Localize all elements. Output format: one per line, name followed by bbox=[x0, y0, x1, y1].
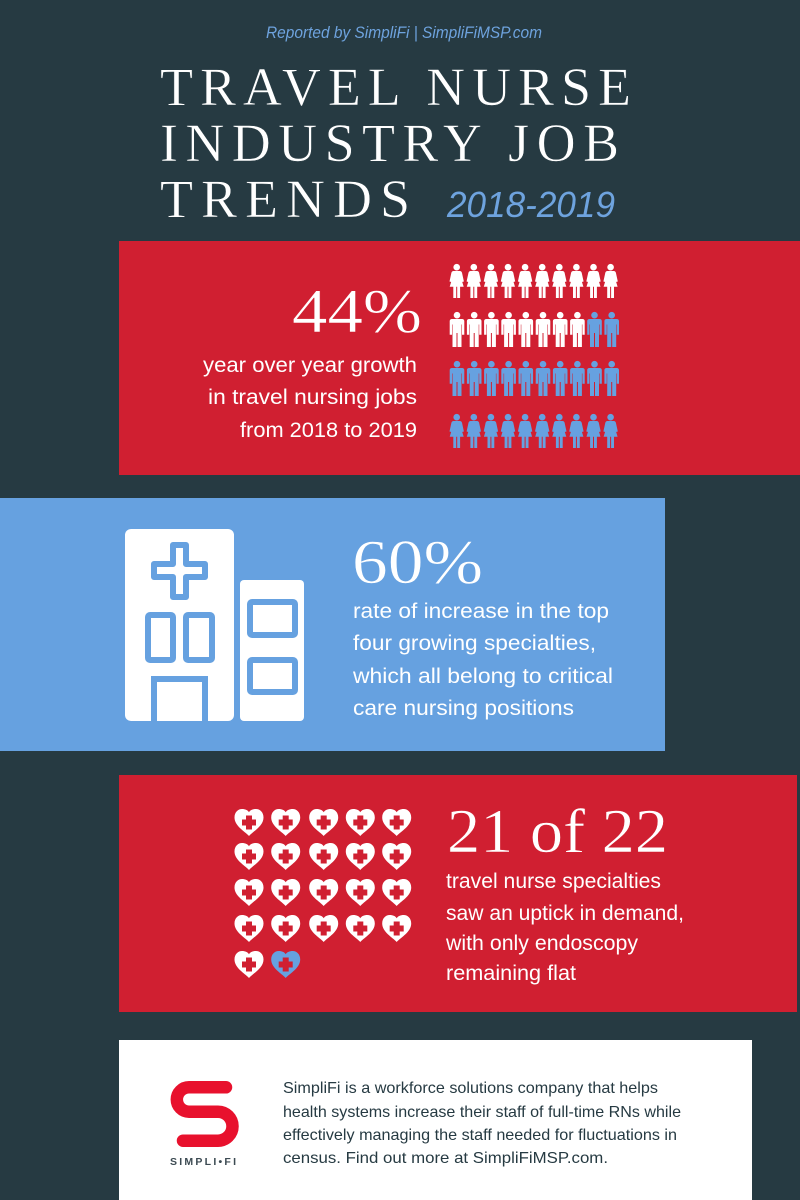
icon row: white women bbox=[450, 264, 618, 298]
panel: 44 percent growth bbox=[119, 241, 800, 475]
icon grid: hearts bbox=[234, 809, 411, 978]
description: company: health systems increase their staff of full-time RNs while bbox=[283, 1104, 681, 1121]
title: TRAVEL NURSE bbox=[160, 57, 631, 117]
description: growth: in travel nursing jobs bbox=[208, 385, 417, 409]
statistic: 60%: 60% bbox=[352, 529, 483, 597]
description: specialties bbox=[352, 599, 613, 720]
title bbox=[160, 57, 631, 229]
logo: SimpliFi bbox=[170, 1087, 236, 1168]
description: growth bbox=[203, 353, 417, 442]
description: company: effectively managing the staff needed for fluctuations in bbox=[283, 1127, 677, 1144]
description: growth: year over year growth bbox=[203, 353, 417, 377]
description: uptick in demand: remaining flat bbox=[446, 962, 576, 985]
panel: 60 percent specialties bbox=[0, 498, 665, 751]
icon row: blue women bbox=[450, 414, 618, 448]
panel: about SimpliFi bbox=[119, 1040, 752, 1200]
description: growth: from 2018 to 2019 bbox=[240, 418, 417, 442]
title: TRENDS bbox=[160, 169, 410, 229]
description: company: SimpliFi is a workforce solutions company that helps bbox=[283, 1080, 658, 1097]
description: company: census. Find out more at SimpliFiMSP.com. bbox=[283, 1150, 608, 1167]
statistic: 44%: 44% bbox=[292, 278, 422, 346]
description: specialties: rate of increase in the top bbox=[353, 599, 609, 623]
panel: 21 of 22 specialties bbox=[119, 775, 797, 1012]
description: uptick in demand: with only endoscopy bbox=[445, 932, 638, 955]
title: INDUSTRY JOB bbox=[160, 113, 619, 173]
description: specialties: care nursing positions bbox=[353, 696, 574, 720]
statistic: 21 of 22: 21 of 22 bbox=[447, 798, 668, 866]
description: uptick in demand bbox=[445, 870, 684, 985]
description: specialties: four growing specialties, bbox=[353, 631, 596, 655]
description: specialties: which all belong to critical bbox=[352, 664, 613, 688]
icon row: blue men bbox=[450, 361, 619, 396]
byline: Reported by SimpliFi | SimpliFiMSP.com bbox=[266, 24, 542, 42]
icon: hospital bbox=[125, 529, 304, 721]
description: uptick in demand: saw an uptick in demand, bbox=[446, 902, 684, 925]
description: uptick in demand: travel nurse specialties bbox=[446, 870, 661, 893]
icon row: white and blue men bbox=[450, 312, 619, 347]
title years: 2018-2019 bbox=[446, 184, 615, 225]
logo: SimpliFi: SIMPLI•FI bbox=[170, 1156, 236, 1168]
description: company bbox=[283, 1080, 681, 1167]
